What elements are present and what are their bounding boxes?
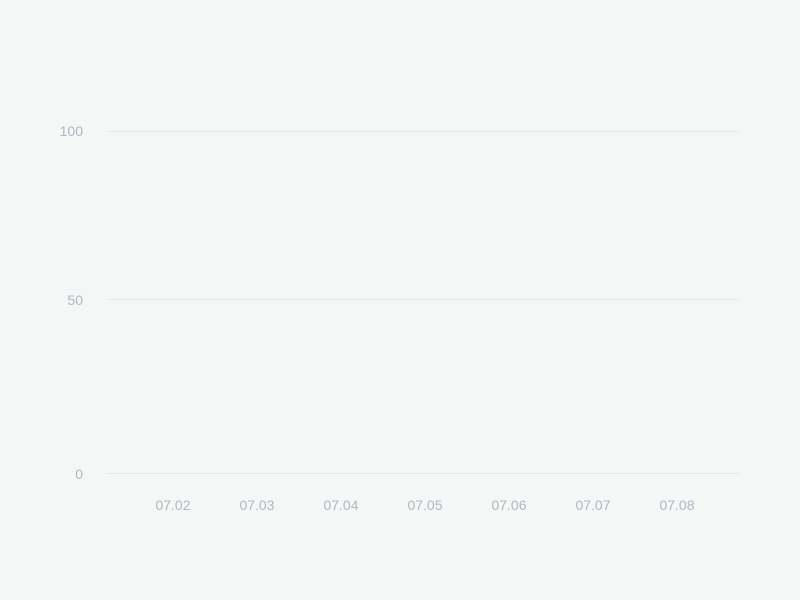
x axis labels: 07.08 [659,497,695,513]
y axis labels: 100 [60,123,83,139]
x axis labels: 07.02 [155,497,191,513]
y axis labels: 0 [75,466,83,482]
y axis labels [60,123,83,482]
x axis labels: 07.06 [491,497,527,513]
y axis labels: 50 [67,292,83,308]
x axis labels: 07.03 [239,497,275,513]
x axis labels: 07.05 [407,497,443,513]
x axis labels: 07.07 [575,497,611,513]
x axis labels [155,497,695,513]
x axis labels: 07.04 [323,497,359,513]
